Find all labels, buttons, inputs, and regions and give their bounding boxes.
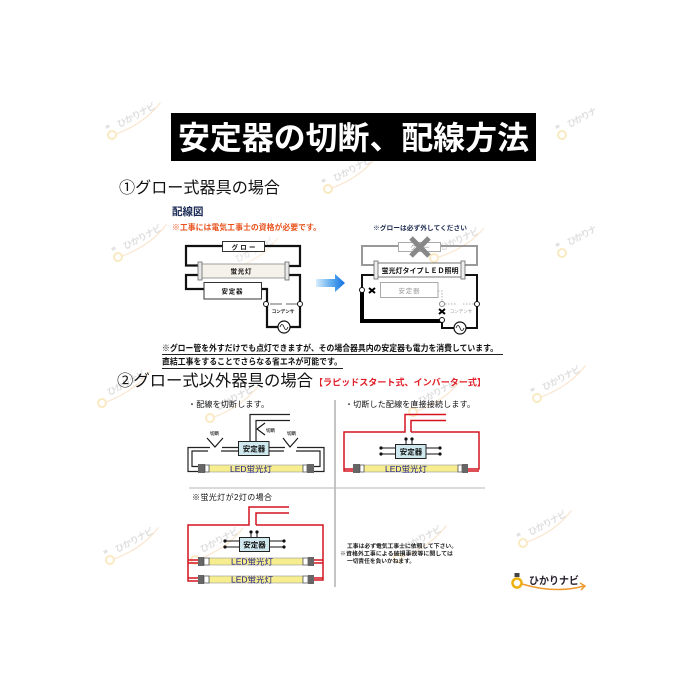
watermark: logo by notes: ひかりナビ — [401, 523, 443, 552]
title banner — [171, 113, 536, 161]
glow starter box: グロー — [232, 242, 256, 252]
caption: connect directly: ・切断した配線を直接接続します。 — [345, 399, 475, 409]
AC source — [278, 321, 290, 333]
disclaimer text: ※資格外工事による破損事故等に関しては — [340, 550, 453, 558]
disconnected ballast: 安定器 — [398, 287, 420, 295]
diagram: direct connection — [344, 414, 479, 474]
watermark: logo left of section one: ひかりナビ — [121, 222, 163, 251]
watermark: logo centre top — [319, 151, 381, 194]
ballast: 安定器 — [243, 540, 266, 550]
watermark: logo centre top: ひかりナビ — [331, 154, 373, 183]
watermark: logo by notes — [389, 520, 451, 563]
watermark: logo over fifth diagram: ひかりナビ — [198, 525, 240, 554]
heading: section one: ①グロー式器具の場合 — [119, 179, 280, 197]
fluorescent tube: 蛍光灯 — [230, 266, 252, 276]
cut marks — [369, 288, 445, 314]
cut labels: 切断 — [210, 430, 219, 437]
diagram: two lamp wiring — [188, 507, 323, 584]
ballast: 安定器 — [243, 444, 266, 454]
disclaimer text: 一切責任を負いかねます。 — [347, 557, 415, 565]
heading note: rapid start and inverter: 【ラピッドスタート式、インバーター式】 — [314, 376, 486, 388]
capacitor label gray: コンデンサ — [450, 308, 473, 315]
watermark: logo right — [553, 224, 601, 258]
caption: two lamp case: ※蛍光灯が2灯の場合 — [192, 492, 272, 502]
grid dividers — [334, 400, 336, 587]
watermark: logo over second diagram — [425, 223, 488, 263]
watermark: logo centre: ひかりナビ — [416, 377, 458, 406]
ballast: 安定器 — [400, 446, 423, 456]
note: remove glow: ※グローは必ず外してください — [373, 223, 468, 232]
watermark: logo over first diagram: ひかりナビ — [233, 235, 275, 264]
disclaimer text: 工事は必ず電気工事士に依頼して下さい。 — [347, 542, 457, 550]
watermark: logo under section two heading — [201, 380, 263, 423]
watermark: logo under section two heading: ひかりナビ — [213, 383, 255, 412]
watermark: logo lower left — [101, 522, 163, 565]
LED tube: LED蛍光灯 — [230, 464, 272, 474]
note text about ballast power — [162, 343, 503, 368]
logo swoosh — [522, 583, 585, 590]
watermark: logo left of section one — [109, 219, 171, 262]
watermark: logo centre — [404, 374, 466, 417]
watermark: logo top left — [103, 97, 165, 140]
watermark: logo right of section two: ひかりナビ — [540, 363, 582, 392]
AC source — [454, 322, 466, 334]
watermark: logo left of section two: ひかりナビ — [105, 368, 147, 397]
capacitor label: コンデンサ — [272, 308, 295, 315]
removed glow starter: グロー — [410, 242, 430, 252]
logo bulb — [512, 578, 522, 588]
ballast box: 安定器 — [222, 286, 243, 296]
note text about ballast power: ※グロー管を外すだけでも点灯できますが、その場合器具内の安定器も電力を消費しています。 — [162, 343, 498, 353]
watermark: logo top right — [553, 106, 601, 140]
watermark: logo left of section two — [93, 365, 155, 408]
caption: cut wiring: ・配線を切断します。 — [188, 399, 269, 409]
watermark: logo top left: ひかりナビ — [115, 100, 157, 129]
LED tube: LED蛍光灯 — [385, 464, 427, 474]
watermark: logo lower right — [514, 505, 576, 548]
watermark: logo over fifth diagram — [186, 522, 248, 565]
subheading: wiring diagram: 配線図 — [172, 205, 204, 218]
watermark: logo top right: ひかりナ — [566, 106, 599, 129]
LED tube: 蛍光灯タイプＬＥＤ照明 — [382, 266, 458, 275]
watermark: logo lower right: ひかりナビ — [526, 508, 568, 537]
watermark: logo right of section two — [528, 360, 590, 403]
note text about ballast power: 直結工事をすることでさらなる省エネが可能です。 — [162, 356, 342, 366]
cut marks — [207, 423, 298, 447]
watermark: logo over second diagram: ひかりナビ — [438, 225, 481, 253]
cut labels: 切断 — [287, 430, 296, 437]
watermark: logo lower left: ひかりナビ — [113, 525, 155, 554]
LED tube lower: LED蛍光灯 — [231, 574, 273, 584]
LED tube upper: LED蛍光灯 — [231, 556, 273, 566]
title text: 安定器の切断、配線方法 — [178, 120, 529, 156]
diagram: cut wiring — [188, 414, 324, 474]
logo: hikari navi — [512, 573, 585, 590]
diagram: glow fixture wiring before — [186, 242, 302, 333]
cut labels — [210, 427, 296, 437]
watermark: logo right: ひかりナ — [566, 224, 599, 247]
heading: section two: ②グロー式以外器具の場合 — [117, 372, 313, 390]
wire end dots — [379, 437, 442, 456]
logo text: ひかりナビ — [529, 574, 579, 587]
diagram: glow fixture wiring after — [360, 238, 480, 334]
wire end dots — [223, 530, 286, 549]
watermark: logo over first diagram — [221, 232, 283, 275]
arrow: before to after — [316, 274, 345, 292]
disclaimer text — [340, 542, 457, 565]
cut labels: 切断 — [266, 427, 275, 434]
warning: licence required: ※工事には電気工事士の資格が必要です。 — [172, 222, 321, 232]
